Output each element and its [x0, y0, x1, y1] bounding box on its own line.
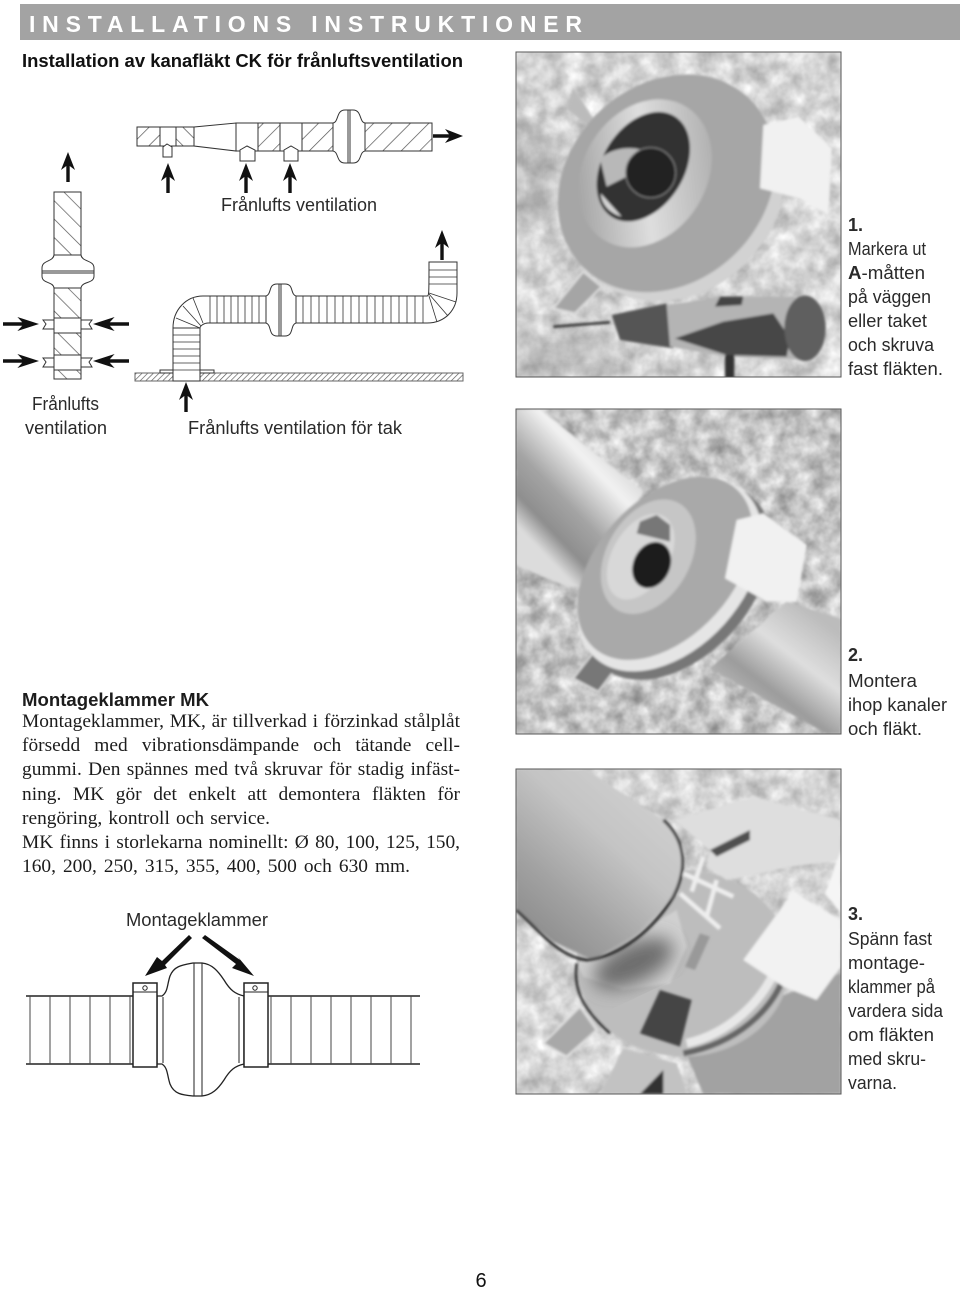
diagram labels: ventilation	[25, 418, 107, 438]
step 1 caption: 1.	[848, 215, 863, 235]
paragraph line 2: försedd med vibrationsdämpande och tätande cell-	[22, 735, 460, 756]
header title: INSTALLATIONS INSTRUKTIONER	[29, 11, 582, 37]
diagram: roof ventilation	[135, 230, 463, 412]
photo 2 frame	[516, 409, 841, 734]
photo 3 frame	[516, 769, 841, 1094]
step 2 caption: Montera	[848, 671, 918, 691]
step 3 caption	[848, 904, 944, 1093]
step 3 caption: vardera sida	[848, 1001, 944, 1021]
step 1 caption	[848, 215, 943, 379]
diagram labels: Frånlufts ventilation för tak	[188, 418, 403, 438]
photo 3: clamp tightened with drill	[516, 769, 841, 1094]
left clamp	[133, 983, 157, 1067]
diagram labels: Frånlufts	[32, 394, 99, 414]
photo 1: fan mounted on wall with drill	[513, 30, 841, 378]
clamp diagram label: Montageklammer	[126, 910, 268, 930]
step 1 caption: Markera ut	[848, 239, 926, 259]
paragraph heading: Montageklammer MK	[22, 689, 209, 710]
paragraph line 1: Montageklammer, MK, är tillverkad i förzinkad stålplåt	[22, 711, 460, 732]
step 2 caption	[848, 645, 947, 739]
diagram: horizontal duct ventilation	[137, 110, 463, 193]
step 3 caption: Spänn fast	[848, 929, 932, 949]
paragraph line 5: rengöring, kontroll och service.	[22, 808, 270, 829]
step 3 caption: 3.	[848, 904, 863, 924]
step 3 caption: varna.	[848, 1073, 897, 1093]
paragraph line 6: MK finns i storlekarna nominellt: Ø 80, 100, 125, 150,	[22, 832, 460, 853]
fan body	[157, 963, 244, 1096]
step 3 caption: klammer på	[848, 977, 936, 997]
step 1 caption: eller taket	[848, 311, 927, 331]
step 1 caption: fast fläkten.	[848, 359, 943, 379]
step 2 caption: ihop kanaler	[848, 695, 947, 715]
text block: Montageklammer MK	[22, 689, 460, 877]
subheading: Installation av kanafläkt CK för frånluftsventilation	[22, 50, 463, 71]
arrows	[3, 152, 129, 368]
step 2 caption: och fläkt.	[848, 719, 922, 739]
diagram labels	[25, 195, 403, 438]
header bar	[20, 4, 960, 40]
step 1 caption: A-måtten	[848, 263, 925, 283]
right clamp	[244, 983, 268, 1067]
paragraph line 3: gummi. Den spännes med två skruvar för stadig infäst-	[22, 759, 460, 780]
clamp diagram	[26, 935, 420, 1096]
diagram: vertical duct ventilation	[3, 152, 129, 379]
step 1 caption: på väggen	[848, 287, 931, 307]
step 2 caption: 2.	[848, 645, 863, 665]
paragraph line 4: ning. MK gör det enkelt att demontera fläkten för	[22, 784, 460, 805]
photo 2: fan connected to duct	[516, 409, 841, 734]
step 3 caption: montage-	[848, 953, 925, 973]
diagram labels: Frånlufts ventilation	[221, 195, 377, 215]
arrows	[161, 129, 463, 193]
paragraph line 7: 160, 200, 250, 315, 355, 400, 500 och 630 mm.	[22, 856, 410, 877]
arrows	[179, 230, 449, 412]
photo 1 frame	[516, 52, 841, 377]
step 3 caption: om fläkten	[848, 1025, 934, 1045]
step 3 caption: med skru-	[848, 1049, 926, 1069]
clamp arrows	[145, 935, 254, 976]
step 1 caption: och skruva	[848, 335, 935, 355]
